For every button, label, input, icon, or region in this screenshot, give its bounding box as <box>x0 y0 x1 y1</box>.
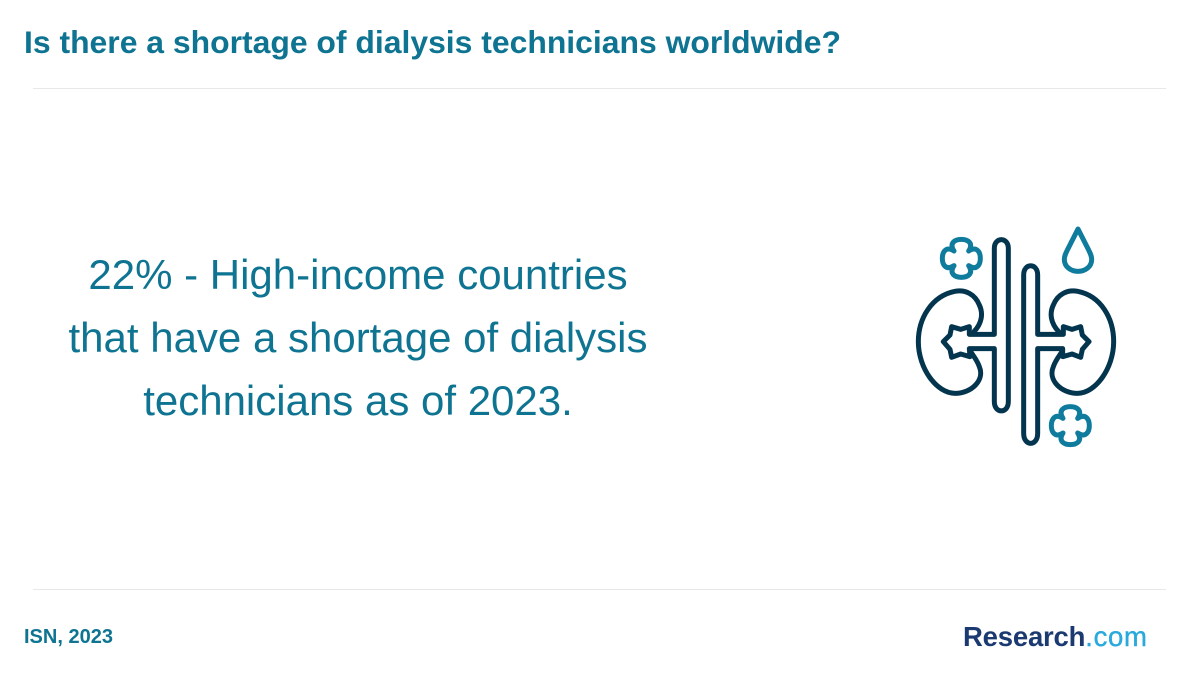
left ureter and pelvis <box>943 240 1008 411</box>
right kidney <box>1051 291 1114 393</box>
icon: kidneys with ureters, crosses and drop <box>916 226 1116 448</box>
left kidney <box>918 291 982 393</box>
cross bottom right <box>1051 407 1089 445</box>
cross top left <box>942 239 980 277</box>
water drop <box>1064 229 1092 271</box>
logo: Research.com: Research.com <box>963 621 1148 652</box>
source: ISN, 2023 <box>24 626 113 648</box>
title: Is there a shortage of dialysis technicians worldwide? <box>24 24 841 60</box>
right ureter and pelvis <box>1024 266 1089 443</box>
main statistic text: 22% - High-income countries <box>88 251 628 298</box>
main statistic text: that have a shortage of dialysis <box>68 314 648 361</box>
main statistic text <box>68 251 648 424</box>
main statistic text: technicians as of 2023. <box>143 377 573 424</box>
